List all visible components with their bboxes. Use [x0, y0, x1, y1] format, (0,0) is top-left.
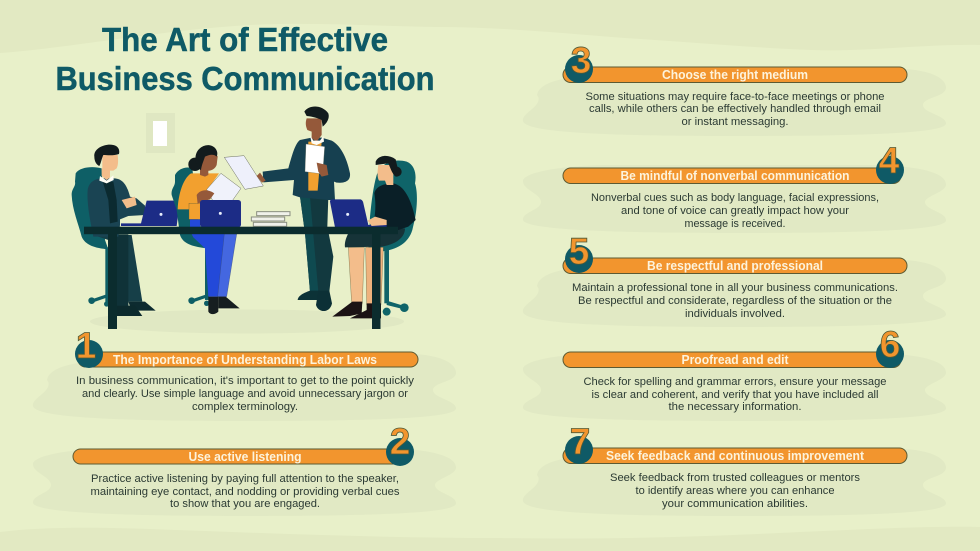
panel 2 body: maintaining eye contact, and nodding or providing verbal cues	[90, 486, 400, 498]
table	[84, 227, 398, 329]
panel 4 body: message is received.	[684, 218, 786, 230]
panel 5 body: Be respectful and considerate, regardless of the situation or the	[578, 295, 892, 307]
panel 7: seek feedback and continuous improvement	[523, 421, 946, 516]
panel 6 body: is clear and coherent, and verify that you have included all	[592, 389, 878, 401]
panel 6 body	[584, 376, 886, 413]
panel 4 heading: Be mindful of nonverbal communication	[620, 169, 850, 183]
panel 5 number badge: 5	[569, 231, 589, 272]
panel 7 body	[610, 472, 860, 510]
panel 3 body: Some situations may require face-to-face meetings or phone	[586, 91, 884, 103]
panel 1: the importance of understanding labor laws	[33, 325, 456, 421]
panel 4 background blob	[523, 165, 946, 233]
panel 1 heading: The Importance of Understanding Labor Laws	[113, 353, 377, 367]
panel 4 header bar	[563, 168, 901, 184]
panel 3 background blob	[523, 68, 946, 136]
panel 5 background blob	[523, 259, 946, 327]
panel 2 body	[90, 473, 400, 510]
right laptop	[330, 199, 387, 227]
panel 7 body: your communication abilities.	[662, 498, 808, 510]
floor shadow	[90, 310, 404, 334]
panel 1 body: In business communication, it's important to get to the point quickly	[76, 375, 414, 387]
handed paper	[224, 156, 263, 189]
panel 2 background blob	[33, 448, 456, 516]
woman in orange with chair	[172, 145, 263, 314]
panel 1 body: and clearly. Use simple language and avoid unnecessary jargon or	[82, 388, 408, 400]
panel 5 heading: Be respectful and professional	[647, 259, 823, 273]
panel 3 header bar	[563, 67, 907, 82]
panel 6 number badge: 6	[880, 324, 900, 365]
panel 3 body	[586, 91, 884, 128]
panel 6 body: the necessary information.	[668, 401, 802, 413]
panel 4 number badge	[876, 140, 904, 184]
panel 6 body: Check for spelling and grammar errors, ensure your message	[584, 376, 886, 388]
panel 4: be mindful of nonverbal communication	[523, 140, 946, 233]
panel 3: choose the right medium	[523, 40, 946, 136]
panel 7 heading: Seek feedback and continuous improvement	[606, 449, 865, 463]
panel 3 body: calls, while others can be effectively handled through email	[589, 103, 881, 115]
panel 7 number badge: 7	[570, 421, 590, 462]
title: The Art of Effective	[102, 21, 388, 58]
books	[251, 212, 290, 226]
illustration: business team meeting	[72, 106, 417, 334]
panel 6 background blob	[523, 353, 946, 421]
panel 2: use active listening	[33, 421, 456, 516]
panel 1 body	[76, 375, 414, 413]
wall window	[146, 113, 175, 153]
panel 1 background blob	[33, 353, 456, 421]
panel 4 number badge: 4	[879, 140, 900, 181]
standing man	[257, 106, 350, 311]
panel 3 body: or instant messaging.	[682, 116, 788, 128]
panel 2 number badge	[386, 421, 414, 466]
panel 2 body: to show that you are engaged.	[170, 498, 320, 510]
panel 5 header bar	[563, 258, 907, 274]
seated woman right with chair	[330, 156, 417, 318]
panel 5: be respectful and professional	[523, 231, 946, 327]
panel 7 background blob	[523, 448, 946, 516]
panel 1 number badge: 1	[76, 325, 96, 366]
panel 2 body: Practice active listening by paying full attention to the speaker,	[91, 473, 399, 485]
title: Business Communication	[56, 60, 434, 97]
left laptop	[121, 201, 180, 226]
middle laptop	[200, 200, 241, 227]
panel 1 header bar	[78, 352, 418, 367]
panel 4 body: and tone of voice can greatly impact how your	[621, 205, 849, 217]
panel 1 body: complex terminology.	[192, 401, 298, 413]
panel 2 number badge: 2	[390, 421, 410, 462]
panel 6: proofread and edit	[523, 324, 946, 421]
panel 7 body: Seek feedback from trusted colleagues or mentors	[610, 472, 860, 484]
panel 4 body: Nonverbal cues such as body language, facial expressions,	[591, 192, 879, 204]
title	[56, 21, 434, 97]
panel 7 body: to identify areas where you can enhance	[636, 485, 834, 497]
panel 5 body: individuals involved.	[685, 308, 785, 320]
panel 3 heading: Choose the right medium	[662, 68, 808, 82]
panel 3 number badge: 3	[571, 40, 591, 81]
panel 4 body	[591, 192, 879, 230]
panel 6 heading: Proofread and edit	[682, 353, 789, 367]
panel 6 header bar	[563, 352, 901, 368]
panel 5 body	[572, 282, 898, 320]
man seated left with chair	[72, 145, 156, 316]
panel 5 body: Maintain a professional tone in all your business communications.	[572, 282, 898, 294]
panel 6 number badge	[876, 324, 904, 368]
panel 7 header bar	[563, 448, 907, 464]
panel 2 header bar	[73, 449, 409, 464]
panel 2 heading: Use active listening	[188, 450, 302, 464]
